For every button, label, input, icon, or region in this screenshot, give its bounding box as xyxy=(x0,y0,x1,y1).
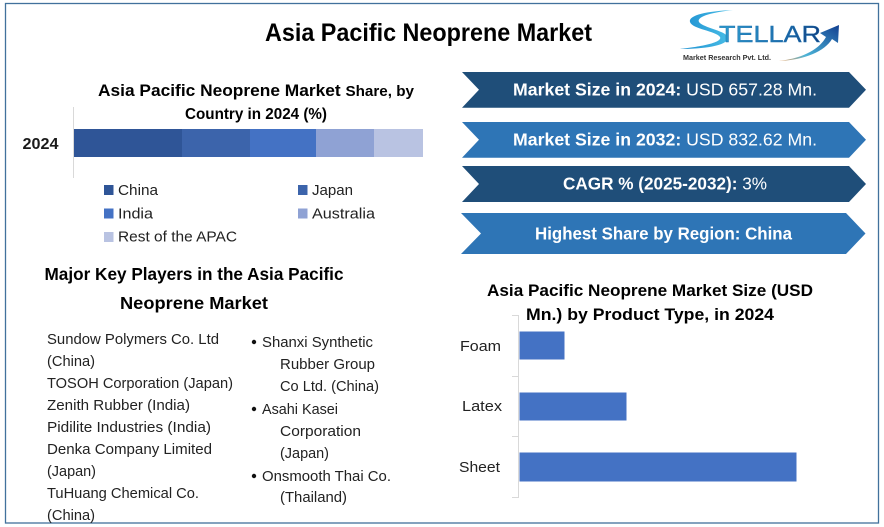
key players list: right column: Asahi Kasei xyxy=(262,401,338,418)
year label: 2024 xyxy=(22,136,59,153)
legend: India xyxy=(118,206,154,222)
banner: market size 2024 xyxy=(462,72,866,108)
legend: China xyxy=(118,182,159,199)
key players list: left column: (China) xyxy=(47,353,95,370)
chart: market size by product type xyxy=(459,282,813,498)
chart: market share by country xyxy=(22,82,423,246)
heading: major key players: Neoprene Market xyxy=(120,293,268,313)
key players list: right column: (Japan) xyxy=(280,445,329,462)
heading: major key players: Major Key Players in the Asia Pacific xyxy=(44,264,344,284)
key players list: right column: Rubber Group xyxy=(280,356,375,373)
category labels: Sheet xyxy=(459,459,501,476)
key players list: right column: (Thailand) xyxy=(280,489,347,506)
heading: major key players xyxy=(44,264,344,313)
logo: Stellar Market Research: TELLAR xyxy=(719,21,821,47)
key players list: right column xyxy=(252,334,391,506)
chart title: Asia Pacific Neoprene Market Size (USD xyxy=(487,282,813,300)
logo: Stellar Market Research: Market Research Pvt. Ltd. xyxy=(683,53,771,62)
category labels xyxy=(459,338,502,476)
banner: CAGR: CAGR % (2025-2032): 3% xyxy=(563,174,767,194)
title: Asia Pacific Neoprene Market xyxy=(265,19,593,47)
key players list: right column: Onsmooth Thai Co. xyxy=(262,468,391,485)
legend: Rest of the APAC xyxy=(118,228,237,246)
logo: Stellar Market Research xyxy=(680,10,839,62)
legend: Japan xyxy=(312,182,353,199)
key players list: left column: (Japan) xyxy=(47,463,96,480)
key players list: right column: Co Ltd. (China) xyxy=(280,378,379,395)
key players list: left column: Zenith Rubber (India) xyxy=(47,397,190,414)
banner: highest share: Highest Share by Region: China xyxy=(535,224,792,244)
banner: highest share xyxy=(461,213,866,254)
key players list: left column: Sundow Polymers Co. Ltd xyxy=(47,331,219,348)
banner: market size 2032 xyxy=(462,122,866,158)
key players list: left column: TuHuang Chemical Co. xyxy=(47,485,199,502)
banner: CAGR xyxy=(462,166,866,202)
key players list: left column: (China) xyxy=(47,507,95,524)
stacked bar xyxy=(74,129,423,157)
chart title xyxy=(98,82,414,123)
key players list: right column: Corporation xyxy=(280,423,361,440)
category labels: Foam xyxy=(460,338,501,355)
chart title: Asia Pacific Neoprene Market Share, by xyxy=(98,82,414,100)
bars xyxy=(520,332,796,482)
key players list: left column xyxy=(47,331,233,524)
key players list: left column: TOSOH Corporation (Japan) xyxy=(47,375,233,392)
legend xyxy=(104,182,376,246)
banner: market size 2032: Market Size in 2032: USD 832.62 Mn. xyxy=(513,130,817,150)
legend: Australia xyxy=(312,206,376,222)
key players list: right column: Shanxi Synthetic xyxy=(262,334,373,351)
chart title xyxy=(487,282,813,324)
key players list: left column: Denka Company Limited xyxy=(47,441,212,458)
key players list: left column: Pidilite Industries (India) xyxy=(47,419,211,436)
banner: market size 2024: Market Size in 2024: USD 657.28 Mn. xyxy=(513,80,817,100)
category labels: Latex xyxy=(462,398,502,415)
chart title: Mn.) by Product Type, in 2024 xyxy=(526,306,775,324)
chart title: Country in 2024 (%) xyxy=(185,106,327,123)
